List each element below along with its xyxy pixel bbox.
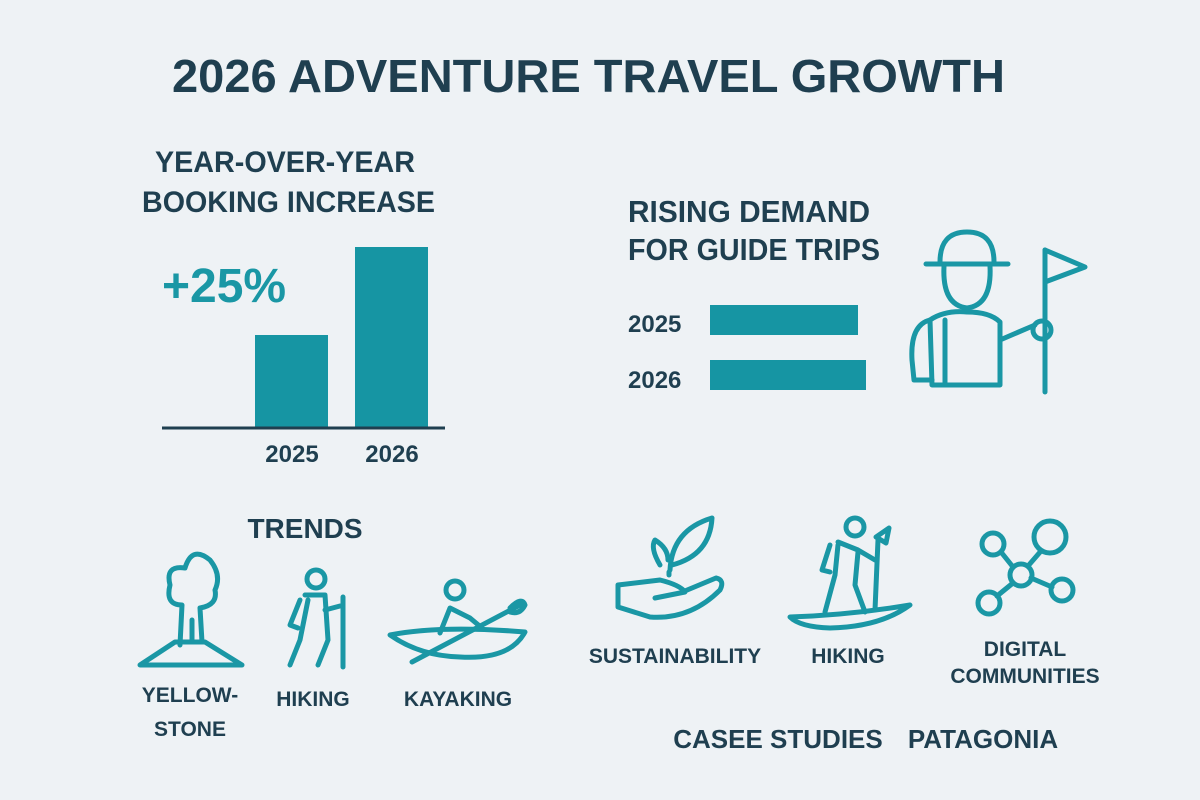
icon: digital communities network — [978, 521, 1073, 614]
heading: booking increase: YEAR-OVER-YEAR — [155, 146, 415, 179]
text: patagonia: PATAGONIA — [908, 724, 1058, 754]
bar chart: guide trips — [628, 305, 866, 394]
panel: booking increase — [142, 146, 445, 468]
label: sustainability: SUSTAINABILITY — [589, 645, 761, 668]
heading: rising demand: RISING DEMAND — [628, 194, 870, 229]
bar chart — [162, 247, 445, 468]
label: hiking: HIKING — [276, 688, 350, 711]
icon: guide with flag — [912, 232, 1085, 392]
label: kayaking: KAYAKING — [404, 688, 512, 711]
icon: kayaking — [390, 581, 525, 662]
icon: hiking paddleboard — [790, 518, 910, 628]
heading: trends: TRENDS — [247, 513, 363, 544]
heading: rising demand: FOR GUIDE TRIPS — [628, 232, 880, 267]
heading: booking increase: BOOKING INCREASE — [142, 186, 435, 219]
text: case studies: CASEE STUDIES — [673, 724, 883, 754]
label: yellowstone: YELLOW- — [142, 684, 238, 707]
bar chart: 2025 — [265, 441, 319, 468]
label: digital communities: DIGITAL — [984, 638, 1066, 661]
icon: hiking — [290, 570, 343, 667]
icon: yellowstone geyser — [140, 554, 242, 665]
bar chart: guide trips: 2025 — [628, 311, 681, 338]
bar chart: guide trips: 2026 — [628, 367, 681, 394]
title: 2026 ADVENTURE TRAVEL GROWTH — [172, 50, 1005, 102]
label: hiking: HIKING — [811, 645, 885, 668]
label: yellowstone: STONE — [154, 718, 226, 741]
bar chart: 2026 — [365, 441, 419, 468]
stat: +25%: +25% — [162, 260, 286, 313]
panel: guide trips — [628, 194, 1085, 394]
panel: trends — [140, 513, 525, 741]
icon: sustainability hand — [618, 518, 722, 617]
panel: trend highlights — [589, 518, 1100, 754]
label: digital communities: COMMUNITIES — [950, 665, 1100, 688]
